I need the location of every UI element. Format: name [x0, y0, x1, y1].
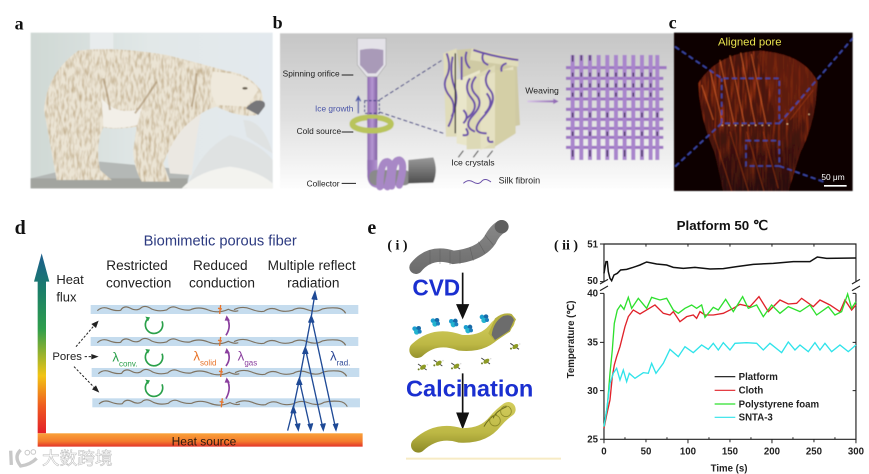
- panel b: freeze spinning schematic: [273, 13, 677, 189]
- label b: b: [273, 13, 283, 33]
- cold source ring: [352, 117, 391, 131]
- y tick labels: 30: [587, 386, 598, 397]
- label ii: ( ii ): [554, 238, 578, 253]
- label e: e: [367, 217, 376, 239]
- heat flux label: flux: [56, 289, 77, 304]
- legend: SNTA-3: [739, 413, 773, 424]
- gas conduction arrows: [225, 315, 230, 399]
- spinning tube: [367, 73, 390, 188]
- y tick labels: 40: [587, 289, 598, 300]
- lambda labels: λ: [330, 349, 337, 364]
- x tick labels: 100: [680, 447, 696, 458]
- scale bar: [821, 172, 847, 187]
- lambda labels: rad.: [337, 358, 350, 367]
- ground: [31, 162, 190, 188]
- ice growth dashed box: [365, 101, 379, 113]
- hollow fibre: [418, 406, 511, 445]
- schematic labels: Cold source: [297, 126, 341, 136]
- ice crystal sheets: [443, 48, 520, 150]
- schematic labels: Ice crystals: [451, 158, 495, 168]
- crystal pointers: [458, 151, 493, 157]
- lambda labels: λ: [238, 349, 244, 364]
- column headings: radiation: [287, 275, 339, 290]
- y tick labels: 50: [587, 276, 598, 287]
- heat source bar: Heat source: [172, 434, 237, 448]
- axis ticks: [600, 244, 856, 443]
- panel c: aligned pore micrograph: [669, 13, 853, 191]
- watermark: [11, 449, 113, 469]
- precursor molecules: [412, 314, 520, 371]
- legend: Polystyrene foam: [739, 399, 819, 410]
- lambda labels: gas: [244, 358, 257, 367]
- micrograph artwork: [674, 33, 853, 191]
- coated fibre: [417, 313, 516, 350]
- pores label and arrows: [52, 321, 99, 393]
- watermark text: 大数跨境: [42, 449, 113, 469]
- x tick labels: [601, 447, 864, 458]
- x tick labels: 300: [848, 447, 864, 458]
- schematic labels: Collector: [307, 179, 340, 189]
- lambda labels: conv.: [119, 359, 137, 368]
- CVD text: CVD: [412, 274, 460, 300]
- ice growth arrow: [356, 97, 361, 113]
- belly highlight: [102, 98, 142, 128]
- collector roller: [369, 157, 436, 187]
- axes frame: [600, 244, 860, 439]
- lower striations: [713, 90, 813, 191]
- series: cloth: [604, 297, 856, 428]
- grey template fibre: [416, 220, 509, 267]
- process arrow 2: [457, 373, 468, 427]
- blue dashed overlays: [675, 38, 853, 182]
- foreground ground strip: [31, 178, 187, 188]
- scale bar: 50 μm: [821, 172, 845, 182]
- column headings: Reduced: [193, 258, 248, 273]
- lambda labels: solid: [200, 358, 216, 367]
- process arrow 1: [457, 273, 468, 317]
- label c: c: [669, 13, 677, 33]
- convection loops: [145, 317, 163, 396]
- series: platform: [604, 257, 856, 281]
- legend: [715, 372, 819, 424]
- heat flux arrow: [34, 253, 49, 433]
- label a: a: [15, 13, 24, 33]
- schematic artwork: [280, 33, 677, 188]
- y tick labels: [587, 239, 599, 446]
- legend: Cloth: [739, 386, 763, 397]
- heat source bar: [38, 433, 363, 448]
- upper dark region: [757, 52, 817, 120]
- heat flux label: Heat: [56, 272, 84, 287]
- calcination text: Calcination: [406, 376, 533, 402]
- pores label and arrows: Pores: [52, 351, 82, 363]
- x tick labels: 150: [722, 447, 738, 458]
- lambda labels: λ: [193, 349, 200, 364]
- column headings: Multiple reflect: [268, 258, 356, 273]
- y tick labels: 51: [587, 239, 599, 250]
- photo scene: [31, 33, 273, 188]
- bright striations: [702, 53, 766, 125]
- micrograph background: [674, 33, 853, 191]
- fur shading: [103, 73, 197, 113]
- spinning orifice syringe: [357, 38, 386, 77]
- heading: Biomimetic porous fiber: [144, 233, 297, 249]
- column headings: convection: [106, 275, 171, 290]
- schematic labels: Weaving: [525, 85, 559, 95]
- fibre layers: [91, 305, 360, 407]
- x tick labels: 50: [641, 447, 651, 458]
- label pointers: [342, 75, 356, 183]
- label i: ( i ): [387, 238, 408, 253]
- silk fibroin legend line: [463, 179, 491, 183]
- y tick labels: 35: [587, 338, 599, 349]
- legend: Platform: [739, 372, 778, 383]
- x tick labels: 0: [601, 447, 607, 458]
- y tick labels: 25: [587, 435, 599, 446]
- snow rocks: [187, 120, 273, 188]
- panel a: polar bear photo: [15, 13, 273, 188]
- bright rim dots: [722, 114, 812, 125]
- lambda labels: [112, 349, 350, 368]
- radiation rays: [288, 292, 338, 431]
- panel e (i): CVD process: [367, 217, 561, 460]
- lower dark fade: [710, 120, 807, 191]
- woven mesh: [566, 55, 667, 160]
- bear nose: [246, 100, 265, 115]
- lambda labels: λ: [112, 350, 119, 365]
- series: SNTA-3: [604, 342, 856, 427]
- far foreleg: [168, 110, 202, 175]
- schematic labels: Spinning orifice: [283, 69, 340, 79]
- label d: d: [15, 217, 26, 239]
- yellow base line: [406, 458, 561, 460]
- head highlight: [211, 72, 258, 107]
- weaving arrow: [527, 99, 559, 104]
- photo background: [31, 33, 273, 188]
- schematic labels: Ice growth: [315, 104, 354, 114]
- panel d: heat transfer diagram: [15, 217, 363, 448]
- schematic labels: [283, 69, 559, 189]
- column headings: conduction: [189, 275, 255, 290]
- x tick labels: 250: [806, 447, 822, 458]
- dashed zoom lines: [379, 59, 443, 133]
- fibre body: [698, 51, 817, 191]
- column headings: Restricted: [106, 258, 168, 273]
- schematic labels: Silk fibroin: [499, 175, 540, 185]
- bear eye: [242, 87, 248, 90]
- panel e (ii): temperature chart: [554, 218, 864, 474]
- x tick labels: 200: [764, 447, 780, 458]
- front snow: [182, 167, 273, 188]
- chart title: Platform 50 ℃: [677, 218, 768, 233]
- polar bear: [44, 49, 263, 182]
- schematic background: [280, 33, 677, 188]
- series: polystyrene foam: [604, 294, 856, 427]
- watermark logo: [11, 450, 37, 466]
- title: aligned pore: Aligned pore: [718, 37, 782, 49]
- pale ice column: [90, 33, 113, 49]
- y axis title: Temperature (℃): [566, 301, 577, 378]
- column headings: [106, 258, 356, 290]
